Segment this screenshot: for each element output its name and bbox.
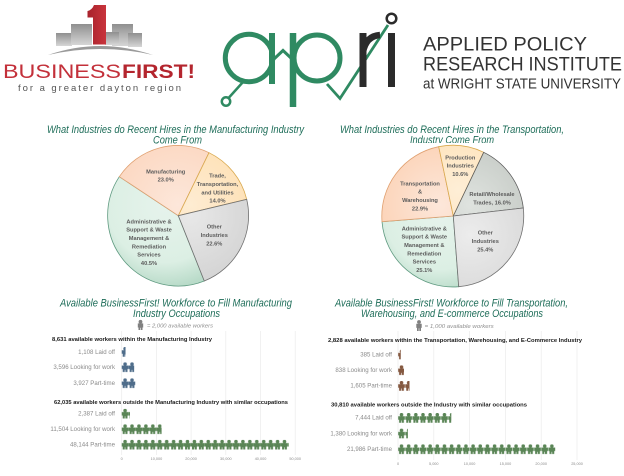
row: looking for work: 838 Looking for work <box>335 367 393 374</box>
axis labels: 20,000 <box>185 457 197 461</box>
slice: other industries: Other <box>478 231 494 237</box>
subheading: within transportation: 2,828 available workers within the Transportation, Warehousing, and E-Commerce Industry <box>328 338 583 344</box>
axis labels <box>121 457 301 461</box>
slice: administrative and support: Services <box>137 253 161 259</box>
row: laid off <box>78 347 126 357</box>
icon: skyline with red number one <box>48 5 153 55</box>
slice: manufacturing: Manufacturing <box>146 170 186 176</box>
row: looking for work outside <box>50 424 162 434</box>
row: part-time outside <box>70 440 289 450</box>
slice: other industries: Other <box>207 225 223 231</box>
row: laid off outside <box>355 413 451 423</box>
slice: administrative and support: 25.1% <box>416 268 432 274</box>
chart: manufacturing workforce pictogram bars <box>50 331 301 461</box>
axis labels: 40,000 <box>255 457 266 461</box>
axis labels: 5,000 <box>429 462 439 466</box>
axis labels: 30,000 <box>220 457 232 461</box>
row: laid off outside: 2,387 Laid off <box>78 410 115 418</box>
heading: manufacturing workforce <box>59 298 293 320</box>
heading: manufacturing workforce: Industry Occupations <box>133 308 220 320</box>
slice: transportation and warehousing: 22.9% <box>412 206 428 212</box>
slice: transportation and warehousing: Transportation <box>400 181 440 187</box>
axis labels: 25,000 <box>571 462 583 466</box>
heading: manufacturing hires: Come From <box>153 134 202 146</box>
row: laid off outside <box>78 409 130 419</box>
pie chart: manufacturing hires <box>108 145 249 286</box>
slice: other industries: 25.4% <box>477 247 493 253</box>
heading: manufacturing hires <box>47 124 305 146</box>
slice: trade, transportation, utilities: 14.0% <box>209 199 226 205</box>
row: part-time outside <box>347 444 555 454</box>
logo text: Applied Policy Research Institute: APPLIED POLICY <box>423 34 587 56</box>
slice: trade, transportation, utilities: Transportation, <box>197 182 239 188</box>
subheading: outside the industry: 30,810 available workers outside the Industry with similar occupations <box>331 402 528 408</box>
slice: administrative and support: Services <box>413 260 436 266</box>
logo wordmark: BUSINESS <box>3 61 121 83</box>
slice: administrative and support: Remediation <box>407 251 442 257</box>
slice: transportation and warehousing: & <box>418 190 422 196</box>
row: part-time <box>350 381 409 391</box>
legend: transportation pictogram key: = 1,000 available workers <box>425 324 494 330</box>
slice: administrative and support: Administrative & <box>402 226 447 232</box>
logo text: Applied Policy Research Institute <box>423 34 622 92</box>
logo: BusinessFirst: FIRST! <box>122 61 195 83</box>
slice: transportation and warehousing: Warehousing <box>402 198 438 204</box>
row: looking for work <box>335 365 404 375</box>
heading: transportation hires: Industry Come From <box>410 134 494 146</box>
slice: production industries <box>439 145 484 216</box>
slice: manufacturing: 23.0% <box>158 178 174 184</box>
row: looking for work outside: 11,504 Looking for work <box>50 426 116 433</box>
slice: other industries <box>178 199 249 281</box>
slice: retail and wholesale: Trades, 16.0% <box>473 200 511 206</box>
axis labels: 15,000 <box>500 462 511 466</box>
subheading: outside manufacturing: 62,035 available workers outside the Manufacturing Industry with similar occupations <box>54 400 289 406</box>
axis labels: 10,000 <box>151 457 162 461</box>
slice: administrative and support: Administrative & <box>126 219 172 225</box>
logo: APRI monogram <box>222 14 396 107</box>
row: part-time <box>73 378 135 388</box>
heading: transportation workforce: Warehousing, and E-commerce Occupations <box>361 308 543 320</box>
legend: transportation pictogram key <box>416 320 494 331</box>
heading: manufacturing hires: What Industries do Recent Hires in the Manufacturing Industry <box>47 124 305 136</box>
heading: transportation hires <box>340 124 564 146</box>
slice: administrative and support: Management & <box>129 236 169 242</box>
slice: administrative and support: Management & <box>404 243 445 249</box>
row: looking for work outside: 1,380 Looking for work <box>330 430 393 437</box>
axis labels <box>397 462 583 466</box>
row: laid off <box>360 350 401 360</box>
row: laid off: 385 Laid off <box>360 351 392 358</box>
row: laid off outside: 7,444 Laid off <box>355 415 392 422</box>
slice: other industries <box>453 208 524 287</box>
slice: trade, transportation, utilities <box>178 153 247 216</box>
logo tagline: for a greater dayton region <box>18 83 181 94</box>
slice: retail and wholesale: Retail/Wholesale <box>469 192 515 198</box>
row: part-time: 1,605 Part-time <box>350 383 393 390</box>
row: part-time: 3,927 Part-time <box>73 380 116 387</box>
slice: administrative and support <box>108 177 204 286</box>
slice: retail and wholesale <box>453 152 523 216</box>
slice: administrative and support: Support & Waste <box>401 235 447 241</box>
subheading: within manufacturing: 8,631 available workers within the Manufacturing Industry <box>52 337 213 343</box>
heading: manufacturing workforce: Available BusinessFirst! Workforce to Fill Manufacturing <box>59 298 293 310</box>
axis labels: 10,000 <box>464 462 475 466</box>
logo: BusinessFirst <box>3 5 195 94</box>
slice: administrative and support: 40.5% <box>141 261 157 267</box>
row: laid off: 1,108 Laid off <box>78 349 115 356</box>
axis labels: 0 <box>121 457 123 461</box>
row: part-time outside: 21,986 Part-time <box>347 446 393 453</box>
axis labels: 20,000 <box>535 462 547 466</box>
legend: manufacturing pictogram key <box>138 320 213 330</box>
slice: administrative and support: Remediation <box>132 244 167 250</box>
slice: other industries: Industries <box>472 239 499 245</box>
row: looking for work outside <box>330 429 408 439</box>
heading: transportation workforce <box>334 298 568 320</box>
heading: transportation hires: What Industries do Recent Hires in the Transportation, <box>340 124 564 136</box>
slice: production industries: 10.6% <box>452 172 468 178</box>
slice: production industries: Industries <box>447 164 474 170</box>
slice: administrative and support: Support & Waste <box>126 228 172 234</box>
heading: transportation workforce: Available BusinessFirst! Workforce to Fill Transportation, <box>334 298 568 310</box>
slice: production industries: Production <box>445 156 476 162</box>
slice: administrative and support <box>382 216 459 287</box>
slice: trade, transportation, utilities: and Utilities <box>201 191 234 197</box>
pie chart: transportation hires <box>382 145 524 287</box>
slice: other industries: 22.6% <box>206 241 222 247</box>
slice: trade, transportation, utilities: Trade, <box>209 174 226 180</box>
axis labels: 0 <box>397 462 399 466</box>
row: looking for work <box>53 362 134 372</box>
axis labels: 50,000 <box>289 457 301 461</box>
row: part-time outside: 48,144 Part-time <box>70 442 116 448</box>
legend: manufacturing pictogram key: = 2,000 available workers <box>147 324 213 330</box>
slice: transportation and warehousing <box>382 147 453 222</box>
slice: other industries: Industries <box>201 233 228 239</box>
slice: manufacturing <box>119 145 209 216</box>
chart: transportation workforce pictogram bars <box>328 331 583 466</box>
row: looking for work: 3,596 Looking for work <box>53 364 116 371</box>
